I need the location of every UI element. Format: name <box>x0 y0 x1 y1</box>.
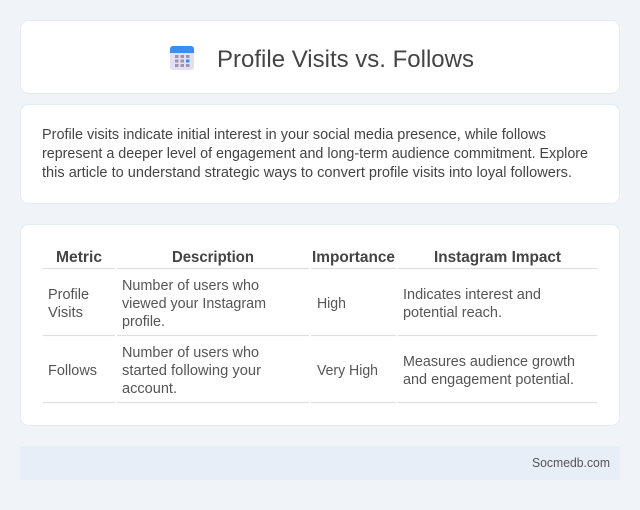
table header: Importance <box>312 249 395 266</box>
table row: follows: Measures audience growth <box>403 354 575 370</box>
table header: Description <box>172 249 254 266</box>
table row: profile visits: profile. <box>122 314 165 330</box>
table header: Metric <box>56 249 102 266</box>
table header <box>56 249 562 266</box>
table row: follows: account. <box>122 381 177 397</box>
intro text <box>42 127 588 181</box>
table row: profile visits: Profile <box>48 287 89 303</box>
intro text: this article to understand strategic ways to convert profile visits into loyal followers. <box>42 165 572 181</box>
table row: follows: and engagement potential. <box>403 372 574 388</box>
table row: follows <box>48 345 575 397</box>
table row: profile visits: Number of users who <box>122 278 259 294</box>
footer source text: Socmedb.com <box>532 456 610 470</box>
intro text: represent a deeper level of engagement and long-term audience commitment. Explore <box>42 146 588 162</box>
table header: Instagram Impact <box>434 249 562 266</box>
intro text: Profile visits indicate initial interest in your social media presence, while follows <box>42 127 546 143</box>
table row: profile visits: High <box>317 296 346 312</box>
footer bar <box>20 446 620 480</box>
table row: profile visits: viewed your Instagram <box>122 296 266 312</box>
panel: introduction <box>20 104 620 204</box>
table row: follows: Very High <box>317 363 378 379</box>
table row: profile visits: potential reach. <box>403 305 502 321</box>
table row: profile visits: Visits <box>48 305 83 321</box>
table row: follows: Follows <box>48 363 97 379</box>
table row: profile visits <box>48 278 541 330</box>
table row: follows: Number of users who <box>122 345 259 361</box>
table row: profile visits: Indicates interest and <box>403 287 541 303</box>
title: Profile Visits vs. Follows <box>217 46 474 73</box>
panel: title card <box>20 20 620 94</box>
icon: calendar <box>170 46 194 70</box>
table row: follows: started following your <box>122 363 261 379</box>
panel: comparison table <box>20 224 620 426</box>
